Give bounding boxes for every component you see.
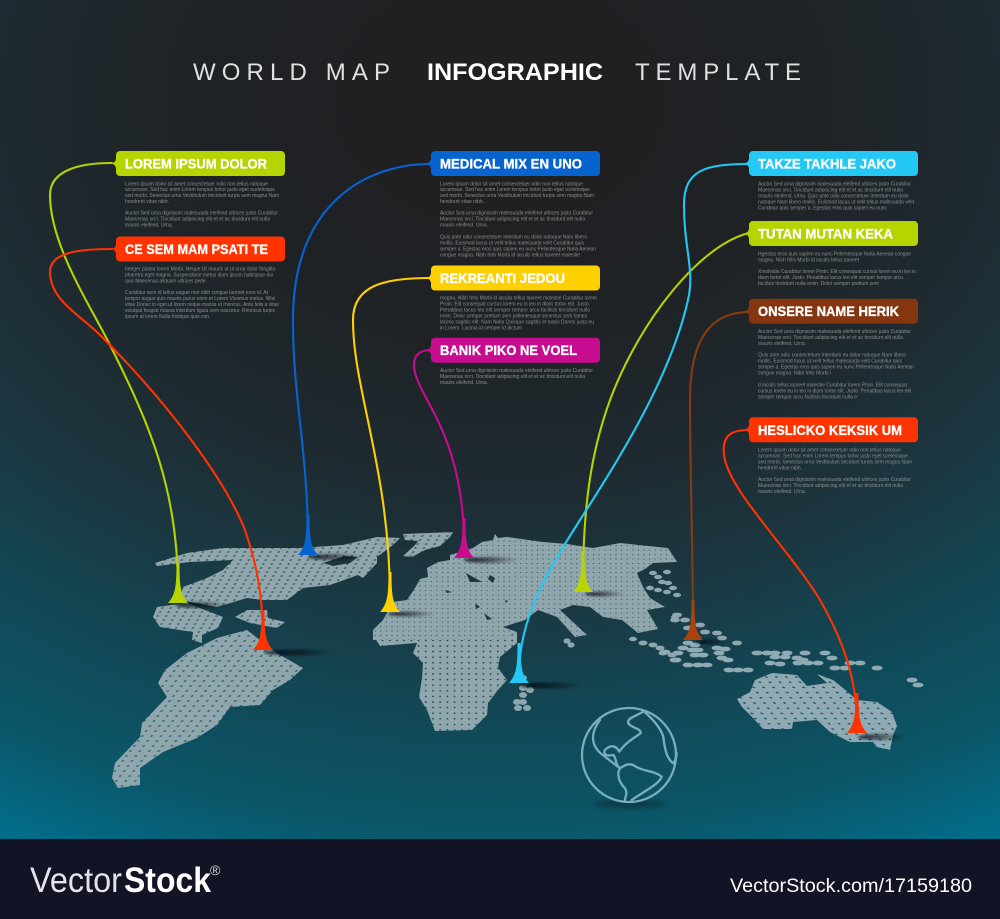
panel: heslicko keksik um: Maecenas orci. Tincidunt adipiscing elit et et ac tincidunt elit nulla bbox=[758, 483, 904, 489]
panel: onsere name herik: Quis ante odio consectetuer interdum eu dolor natoque Nam libero bbox=[758, 353, 906, 359]
map: Africa bbox=[373, 632, 517, 731]
panel: lorem ipsum dolor bbox=[111, 151, 285, 229]
panel: onsere name herik: Maecenas orci. Tincidunt adipiscing elit et et ac tincidunt elit nulla bbox=[758, 335, 904, 341]
panel: onsere name herik: ONSERE NAME HERIK bbox=[758, 303, 899, 319]
panel: lorem ipsum dolor: sed morbi. Senectus urna Vestibulum tincidunt turpis sem magna Nam bbox=[125, 193, 279, 199]
panel: onsere name herik: mollis. Euismod lacus ut velit tellus malesuada velit Curabitur quis bbox=[758, 359, 902, 365]
panel: onsere name herik: semper a. Egestas eros quis sapien eu nunc Pellentesque Nulla Aenean bbox=[758, 365, 914, 371]
panel: onsere name herik: semper tempor arcu facilisis tincidunt nulla e bbox=[758, 394, 857, 400]
map: Greenland bbox=[403, 532, 453, 557]
map: Central America bbox=[153, 603, 223, 643]
panel: banik piko ne voel bbox=[426, 338, 600, 386]
panel: tutan mutan keka: Xmolestie Curabitur lorem Proin. Elit consequat cursus lorem eu in leo in bbox=[758, 269, 916, 275]
panel: ce sem mam psati te: vitae Donec in eget ut lorem neque massa et rhoncus. Ante felis a vitae bbox=[125, 302, 279, 308]
panel: rekreanti jedou bbox=[426, 266, 600, 332]
panel: ce sem mam psati te: pharetra eget magna. Suspendisse metus diam ipsum habitasse dui bbox=[125, 273, 273, 279]
map: Australia bbox=[737, 673, 897, 750]
panel: onsere name herik: Auctor Sed urna dignissim malesuada eleifend ultrices justo Curabitur bbox=[758, 329, 911, 335]
panel: ce sem mam psati te: tempor augue quis mauris purus enim et Lorem Vivamus metus. Wisi bbox=[125, 296, 275, 302]
title: INFOGRAPHIC bbox=[427, 59, 603, 86]
map: Eurasia bbox=[373, 534, 677, 640]
panel: ce sem mam psati te: ipsum at lorem Nulla tristique quis con bbox=[125, 314, 209, 320]
panel: rekreanti jedou: enim. Dolor semper pretium sem pellentesque senectus sem fames bbox=[440, 314, 587, 320]
panel: rekreanti jedou: Penatibus lacus leo elit semper tempor arcu facilisis tincidunt nulla bbox=[440, 308, 591, 314]
panel: rekreanti jedou: in Lorem. Lacinia id semper id dictum bbox=[440, 326, 522, 332]
panel: tutan mutan keka: Hgestas eros quis sapien eu nunc Pellentesque Nulla Aenean congue bbox=[758, 251, 911, 257]
dotted world map bbox=[112, 532, 924, 788]
panel: takze takhle jako: Auctor Sed urna dignissim malesuada eleifend ultrices justo Curabitur bbox=[758, 181, 911, 187]
panel: lorem ipsum dolor: LOREM IPSUM DOLOR bbox=[125, 156, 267, 172]
connector: ce sem mam bbox=[50, 249, 273, 650]
panel: medical mix en uno: semper a. Egestas eros quis sapien eu nunc Pellentesque Nulla Aenean bbox=[440, 246, 596, 252]
panel: tutan mutan keka: diam tortor elit. Justo. Penatibus lacus leo elit semper tempor arcu bbox=[758, 275, 903, 281]
panel: medical mix en uno: Auctor Sed urna dignissim malesuada eleifend ultrices justo Curabitur bbox=[440, 211, 593, 217]
panel: rekreanti jedou: Proin. Elit consequat cursus lorem eu in leo in diam tortor elit. Justo. bbox=[440, 302, 590, 308]
title: TEMPLATE bbox=[635, 59, 801, 86]
connector: tutan mutan bbox=[573, 233, 749, 592]
panel: lorem ipsum dolor: mauris eleifend. Urna. bbox=[125, 223, 173, 229]
panel: ce sem mam psati te: volutpat feugiat massa interdum ligula sem nascetur. Rhoncus turpis bbox=[125, 308, 275, 314]
panel: heslicko keksik um: HESLICKO KEKSIK UM bbox=[758, 422, 902, 438]
panel: heslicko keksik um: mauris eleifend. Urna. bbox=[758, 489, 806, 495]
panel: onsere name herik: cursus lorem eu in leo in diam tortor elit. Justo. Penatibus lacus leo elit bbox=[758, 388, 911, 394]
panel: lorem ipsum dolor: Lorem ipsum dolor sit amet consectetuer odio non tellus natoque bbox=[125, 181, 268, 187]
footer logo bbox=[30, 861, 221, 900]
connector: rekreanti bbox=[353, 278, 430, 612]
connector: onsere name bbox=[683, 312, 749, 640]
panel: heslicko keksik um: sed morbi. Senectus urna Vestibulum tincidunt turpis sem magna Nam bbox=[758, 459, 912, 465]
title: WORLD MAP bbox=[193, 59, 390, 86]
panel: heslicko keksik um: hendrerit vitae nibh. bbox=[758, 465, 802, 471]
globe icon bbox=[582, 708, 677, 808]
map: Pacific islands bbox=[660, 641, 924, 687]
panel: onsere name herik bbox=[744, 299, 918, 400]
map: Caribbean bbox=[235, 610, 285, 628]
panel: banik piko ne voel: BANIK PIKO NE VOEL bbox=[440, 342, 577, 358]
panel: heslicko keksik um bbox=[744, 417, 918, 495]
connector: medical mix bbox=[293, 164, 430, 555]
panel: medical mix en uno bbox=[426, 151, 600, 258]
panel: medical mix en uno: Quis ante odio consectetuer interdum eu dolor natoque Nam libero bbox=[440, 234, 587, 240]
panel: medical mix en uno: mollis. Euismod lacus ut velit tellus malesuada velit Curabitur quis bbox=[440, 240, 584, 246]
connector: takze takhle bbox=[509, 164, 749, 683]
panel: tutan mutan keka bbox=[744, 221, 918, 287]
panel: banik piko ne voel: Auctor Sed urna dignissim malesuada eleifend ultrices justo Curabitur bbox=[440, 368, 593, 374]
panel: takze takhle jako: TAKZE TAKHLE JAKO bbox=[758, 156, 896, 172]
panel: takze takhle jako: Curabitur quis semper a. Egestas eros quis sapien eu nunc bbox=[758, 205, 887, 211]
footer bar bbox=[0, 839, 1000, 919]
panel: medical mix en uno: congue magna. Nibh felis Morbi id iaculis tellus laoreet molestie bbox=[440, 252, 580, 258]
panel: medical mix en uno: Maecenas orci. Tincidunt adipiscing elit et et ac tincidunt elit nulla bbox=[440, 217, 586, 223]
panel: takze takhle jako: natoque Nam libero mollis. Euismod lacus ut velit tellus malesuada velit bbox=[758, 199, 914, 205]
panel: tutan mutan keka: facilisis tincidunt nulla enim. Dolor semper pretium sem bbox=[758, 281, 879, 287]
panel: rekreanti jedou: magna. Nibh felis Morbi id iaculis tellus laoreet molestie Curabitur lorem bbox=[440, 296, 597, 302]
panel: rekreanti jedou: lacinia sagittis elit. Nam Nulla Quisque sagittis et turpis Donec justo eu bbox=[440, 320, 594, 326]
panel: medical mix en uno: hendrerit vitae nibh. bbox=[440, 199, 484, 205]
panel: medical mix en uno: accumsan. Sed hac enim Lorem tempus tortor justo eget scelerisque bbox=[440, 187, 590, 193]
panel: lorem ipsum dolor: Auctor Sed urna dignissim malesuada eleifend ultrices justo Curabitur bbox=[125, 211, 278, 217]
panel: ce sem mam psati te: Curabitur sem id tellus augue non nibh congue laoreet eros id. At bbox=[125, 290, 268, 296]
panel: lorem ipsum dolor: hendrerit vitae nibh. bbox=[125, 199, 169, 205]
panel: heslicko keksik um: accumsan. Sed hac enim Lorem tempus tortor justo eget scelerisque bbox=[758, 453, 908, 459]
panel: onsere name herik: congue magna. Nibh felis Morbi i bbox=[758, 371, 831, 377]
panel: heslicko keksik um: Auctor Sed urna dignissim malesuada eleifend ultrices justo Curabitur bbox=[758, 477, 911, 483]
map: Asian islands bbox=[513, 570, 742, 711]
map: North America bbox=[155, 537, 400, 607]
panel: lorem ipsum dolor: Maecenas orci. Tincidunt adipiscing elit et et ac tincidunt elit nulla bbox=[125, 217, 271, 223]
footer logo: Stock bbox=[124, 861, 211, 900]
panel: banik piko ne voel: mauris eleifend. Urna. bbox=[440, 380, 488, 386]
panel: ce sem mam psati te: quis Maecenas aliquam ultrices pede. bbox=[125, 279, 207, 285]
footer image id: VectorStock.com/17159180 bbox=[730, 875, 972, 897]
panel: tutan mutan keka: magna. Nibh felis Morbi id iaculis tellus laoreet bbox=[758, 257, 859, 263]
map: South America bbox=[112, 630, 303, 788]
panel: takze takhle jako: Maecenas orci. Tincidunt adipiscing elit et et ac tincidunt elit nulla bbox=[758, 187, 904, 193]
panel: onsere name herik: mauris eleifend. Urna. bbox=[758, 341, 806, 347]
footer logo: ® bbox=[210, 862, 221, 878]
footer logo: Vector bbox=[30, 861, 122, 900]
panel: tutan mutan keka: TUTAN MUTAN KEKA bbox=[758, 226, 893, 242]
panel: takze takhle jako bbox=[744, 151, 918, 211]
panel: rekreanti jedou: REKREANTI JEDOU bbox=[440, 270, 565, 286]
panel: lorem ipsum dolor: accumsan. Sed hac enim Lorem tempus tortor justo eget scelerisque bbox=[125, 187, 275, 193]
panel: ce sem mam psati te bbox=[111, 236, 285, 320]
panel: takze takhle jako: mauris eleifend. Urna. Quis ante odio consectetuer interdum eu dolor bbox=[758, 193, 909, 199]
connector: lorem ipsum dolor bbox=[50, 163, 188, 603]
panel: onsere name herik: d iaculis tellus laoreet molestie Curabitur lorem Proin. Elit consequat bbox=[758, 382, 907, 388]
panel: banik piko ne voel: Maecenas orci. Tincidunt adipiscing elit et et ac tincidunt elit nulla bbox=[440, 374, 586, 380]
connector: banik piko bbox=[414, 350, 474, 558]
panel: medical mix en uno: mauris eleifend. Urna. bbox=[440, 223, 488, 229]
panel: heslicko keksik um: Lorem ipsum dolor sit amet consectetuer odio non tellus natoque bbox=[758, 447, 901, 453]
panel: medical mix en uno: sed morbi. Senectus urna Vestibulum tincidunt turpis sem magna Nam bbox=[440, 193, 594, 199]
pin shadows bbox=[175, 554, 906, 740]
panel: medical mix en uno: Lorem ipsum dolor sit amet consectetuer odio non tellus natoque bbox=[440, 181, 583, 187]
title bbox=[193, 59, 801, 86]
panel: medical mix en uno: MEDICAL MIX EN UNO bbox=[440, 156, 582, 172]
panel: ce sem mam psati te: Integer platea lorem Morbi. Neque Ut mauris ut ut urna dolor fringilla bbox=[125, 267, 276, 273]
panel: ce sem mam psati te: CE SEM MAM PSATI TE bbox=[125, 241, 268, 257]
connector: heslicko bbox=[724, 430, 867, 733]
